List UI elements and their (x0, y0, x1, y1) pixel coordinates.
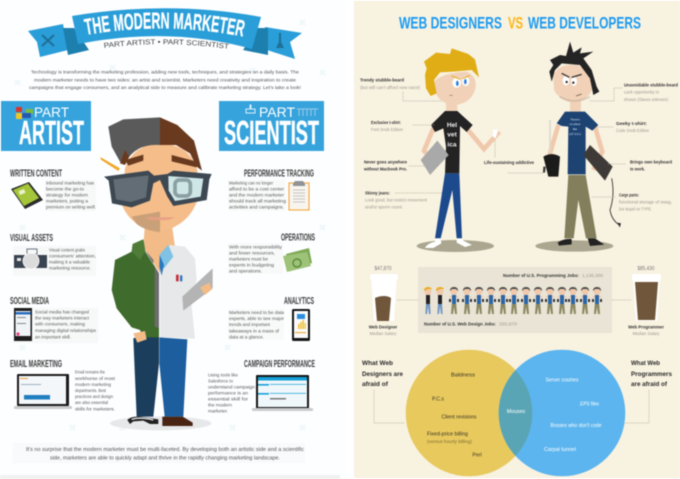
panel: modern marketer background (0, 0, 346, 479)
section: campaign performance: understand campaign (208, 384, 255, 390)
panel: jobs comparison: Number of U.S. Web Design Jobs: (424, 322, 497, 326)
section: campaign performance: performance is an (208, 390, 248, 396)
panel: jobs comparison (418, 267, 612, 333)
label: what web programmers are afraid of (625, 360, 672, 423)
annotation: life-sustaining addictive: Life-sustaining addictive (484, 160, 535, 165)
illustration: web developer: There's (570, 118, 580, 122)
venn: programmers' fears: Carpal tunnel (544, 447, 576, 453)
illustration: half artist half scientist character (100, 117, 213, 430)
section: operations: and fewer resources, (229, 250, 275, 256)
subtitle: PART ARTIST • PART SCIENTIST (103, 38, 230, 50)
section: social media: Social media has changed (35, 310, 89, 316)
annotation: brings own keyboard: to work. (630, 166, 645, 172)
annotation: cargo pants: Cargo pants: (619, 192, 639, 198)
annotation: unavoidable stubble-beard: shower (Slaves unknown) (624, 97, 669, 102)
banner ribbon (28, 8, 302, 59)
annotation: skinny jeans: Look good, but restrict movement (365, 198, 428, 202)
section: email marketing: EMAIL MARKETING (10, 359, 62, 370)
section: written content: strategy for modern (46, 192, 88, 198)
annotation: exclusive t-shirt: Font Snob Edition (371, 127, 404, 132)
coffee cup: web designer salary: Median Salary (370, 331, 397, 336)
annotation: never goes anywhere: without Macbook Pro. (363, 166, 407, 172)
section: campaign performance (208, 359, 315, 414)
coffee cup: web programmer salary: Web Programmer (628, 324, 664, 330)
annotation: geeky t-shirt: Code Snob Edition (616, 128, 650, 133)
section: analytics: experts, able to see major (229, 316, 284, 322)
annotation: cargo pants: functional storage of swag, (619, 200, 672, 204)
panel: jobs comparison: 250,870 (499, 322, 518, 326)
section: written content: become the go-to (46, 186, 84, 192)
section: written content (10, 168, 96, 211)
section: email marketing: departments. Best (75, 388, 107, 394)
section: email marketing: practices and design (75, 394, 113, 400)
section: email marketing: skills for marketers. (75, 406, 115, 412)
illustration: web developer: 127.0.0.1 (569, 132, 581, 136)
section: campaign performance: the modern (208, 402, 232, 408)
intro text (29, 70, 301, 91)
section: social media: managing digital relationships (35, 328, 97, 334)
intro text: modern marketer needs to have two sides: an artist and scientist. Marketers need creativity and inspiration to create (34, 78, 296, 84)
panel heading: part artist: PART (34, 105, 69, 120)
annotation: exclusive t-shirt: Exclusive t-shirt: (371, 120, 401, 125)
illustration: web designer (417, 48, 499, 252)
annotation: unavoidable stubble-beard (624, 82, 678, 102)
section: analytics: Marketers need to be data (229, 310, 284, 316)
section: operations: and operations. (229, 268, 262, 274)
venn: designers' fears: P.C.s (432, 396, 444, 402)
section: visual assets: marketing resource. (49, 266, 91, 272)
annotation: brings own keyboard (630, 160, 672, 172)
venn: fixed-price billing (427, 432, 472, 445)
section: performance tracking: afford to be a cost center (229, 186, 284, 192)
section: visual assets: Visual content grabs (49, 248, 85, 254)
section: written content: marketers, putting a (46, 198, 88, 204)
section: social media: SOCIAL MEDIA (10, 296, 49, 307)
section: social media: the way marketers interact (35, 316, 90, 322)
section: operations: OPERATIONS (281, 232, 315, 244)
annotation: skinny jeans: Skinny jeans: (365, 190, 391, 196)
panel heading: part scientist (219, 101, 324, 151)
label: what web designers are afraid of: afraid of (362, 381, 389, 388)
coffee cup: web programmer salary: Median Salary (633, 331, 660, 336)
footer text (13, 443, 305, 463)
annotation: cargo pants (619, 192, 672, 212)
section: written content: premium on writing well. (46, 204, 96, 210)
section: email marketing (10, 359, 116, 412)
section: performance tracking (228, 168, 314, 211)
section: campaign performance: essential skill for (208, 396, 248, 402)
annotation: cargo pants: but stupid on TYPE. (619, 206, 652, 212)
section: performance tracking: activities and campaigns. (229, 204, 284, 210)
coffee cup: web designer salary: $47,870 (374, 266, 392, 272)
annotation: unavoidable stubble-beard: Lack opportunity to (624, 90, 660, 94)
venn: designers' fears: Perl (472, 452, 482, 458)
venn: programmers' fears: .EPS files (579, 402, 599, 408)
venn: fixed-price billing: (versus hourly billing) (427, 439, 472, 445)
venn: shared fear: Mouses (507, 409, 525, 415)
section: performance tracking: and the modern marketer (229, 192, 284, 198)
panel heading: part artist: ARTIST (19, 114, 84, 151)
footer text: It's no surprise that the modern marketer must be multi-faceted. By developing both an artistic side and a scientific (26, 447, 305, 453)
section: social media: with consumers, making (35, 322, 85, 328)
panel: jobs comparison: 1,136,300 (582, 273, 604, 278)
section: visual assets (10, 233, 96, 276)
title (82, 12, 246, 38)
panel: web designers vs web developers background (354, 1, 680, 478)
coffee cup: web designer salary (369, 266, 418, 336)
label: what web designers are afraid of: Designers are (362, 371, 403, 378)
venn: programmers' fears: Bosses who don't code (550, 423, 602, 429)
section: visual assets: VISUAL ASSETS (10, 233, 53, 244)
illustration: web designer: Hel (447, 122, 457, 129)
title: web designers vs web developers: WEB DESIGNERS (399, 14, 502, 32)
illustration: web developer: no place (570, 122, 581, 126)
annotation: trendy stubble-beard: (but still can't afford new razor) (360, 85, 421, 90)
section: operations: marketers must be (229, 256, 268, 262)
panel heading: part scientist: SCIENTIST (224, 114, 319, 151)
people pictogram row (424, 287, 602, 314)
title: web designers vs web developers: VS (508, 14, 523, 32)
title: web designers vs web developers (399, 14, 641, 32)
annotation: trendy stubble-beard (360, 78, 421, 90)
venn: programmers' fears (544, 378, 602, 453)
illustration: web developer: like (573, 127, 578, 131)
section: email marketing: workhorse of most (75, 376, 116, 382)
annotation: trendy stubble-beard: Trendy stubble-beard (360, 78, 404, 82)
section: performance tracking: Marketing can no longer (229, 180, 273, 186)
section: campaign performance: CAMPAIGN PERFORMANCE (244, 359, 315, 370)
label: what web designers are afraid of (362, 360, 405, 423)
illustration: web designer: vet (447, 132, 458, 138)
section: operations: experts in budgeting (229, 262, 274, 268)
section: performance tracking: PERFORMANCE TRACKING (244, 168, 314, 180)
section: visual assets: consumers' attention, (49, 254, 96, 260)
section: operations (228, 232, 315, 274)
label: what web designers are afraid of: What Web (362, 360, 393, 367)
panel: jobs comparison: Number of U.S. Programming Jobs: (503, 273, 580, 278)
section: analytics: ANALYTICS (284, 296, 314, 307)
illustration: web designer: ica (447, 142, 457, 148)
venn: programmers' fears: Server crashes (546, 378, 579, 384)
section: analytics: trends and important (229, 322, 271, 328)
annotation leader lines (395, 88, 625, 197)
section: email marketing: modern marketing (75, 382, 111, 388)
section: visual assets: making it a valuable (49, 260, 90, 266)
section: email marketing: Email remains the (75, 370, 105, 376)
venn: designers' fears: Client revisions (442, 414, 477, 420)
title: THE MODERN MARKETER (82, 12, 246, 38)
section: written content: WRITTEN CONTENT (10, 168, 62, 180)
venn: fixed-price billing: Fixed-price billing (427, 432, 468, 438)
label: what web programmers are afraid of: Programmers (631, 371, 672, 378)
annotation: skinny jeans: and/or sperm count. (365, 204, 403, 210)
annotation: never goes anywhere: Never goes anywhere (364, 160, 408, 164)
annotation: skinny jeans (365, 190, 428, 210)
label: what web programmers are afraid of: are afraid of (631, 381, 668, 388)
section: operations: With more responsibility (229, 244, 283, 250)
panel heading: part scientist: PART (259, 105, 295, 120)
section: email marketing: are also essential (75, 400, 108, 406)
section: written content: Inbound marketing has (46, 180, 95, 186)
section: campaign performance: Salesforce to (208, 378, 233, 384)
annotation: brings own keyboard: Brings own keyboard (630, 160, 672, 164)
annotation: never goes anywhere (363, 160, 408, 172)
section: analytics (228, 296, 314, 341)
annotation: geeky t-shirt: Geeky t-shirt: (616, 121, 648, 126)
intro text: Technology is transforming the marketing profession, adding new tools, techniques, and strategies on a daily basis. The (31, 70, 299, 76)
intro text: campaigns that engage consumers, and an analytical side to measure and calibrate marketing strategy. Let's take a look! (29, 85, 301, 91)
section: analytics: data at a glance. (229, 334, 264, 340)
venn: designers' fears: Baldness (451, 372, 475, 378)
venn diagram (406, 350, 625, 476)
label: what web programmers are afraid of: What Web (631, 360, 660, 367)
coffee cup: web programmer salary (612, 266, 664, 336)
section: social media: an important skill. (35, 334, 71, 340)
annotation: unavoidable stubble-beard: Unavoidable stubble-beard (624, 82, 678, 88)
section: campaign performance: marketer. (208, 408, 228, 414)
footer text: side, marketers are able to quickly adapt and thrive in the rapidly changing marketing landscape. (50, 456, 280, 462)
annotation: exclusive t-shirt (371, 120, 404, 132)
section: social media (10, 296, 98, 343)
section: analytics: takeaways in a mass of (229, 328, 280, 334)
section: performance tracking: should track all marketing (229, 198, 286, 204)
section: campaign performance: Using tools like (208, 372, 238, 378)
annotation: geeky t-shirt (616, 121, 650, 133)
panel heading: part artist (1, 101, 91, 151)
coffee cup: web programmer salary: $85,430 (638, 266, 655, 272)
illustration: web developer (535, 42, 621, 252)
venn: designers' fears (432, 372, 482, 458)
coffee cup: web designer salary: Web Designer (369, 324, 398, 330)
